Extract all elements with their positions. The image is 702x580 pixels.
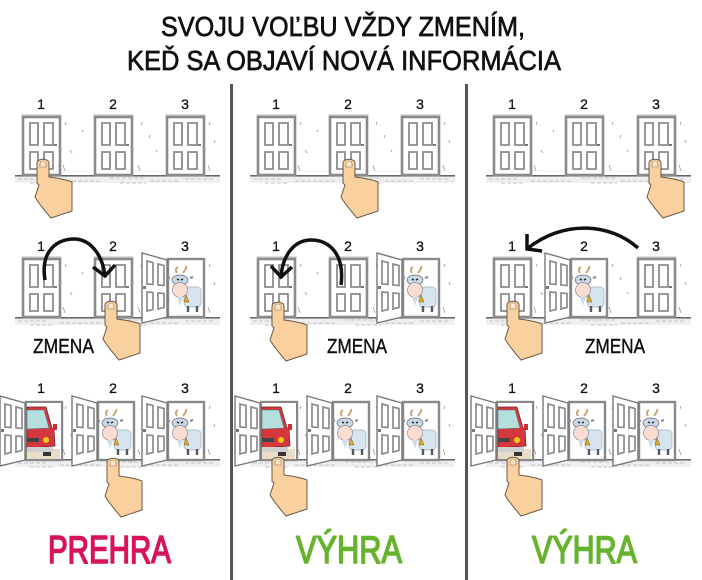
- scene: pick door 2: [250, 96, 455, 218]
- result: vyhra: VÝHRA: [296, 529, 402, 572]
- scene: switch to door 1: [250, 238, 455, 361]
- icon: hand on door 2: [103, 301, 140, 360]
- arrow: door 1 to door 2: [44, 239, 115, 280]
- scene: pick door 1: [15, 96, 220, 218]
- icon: hand on door 1 reveal: [270, 457, 307, 516]
- panel: scenario 1, loss: [0, 96, 220, 572]
- panel: scenario 3, win: [471, 96, 691, 572]
- scene: reveal, car behind door 1: [471, 380, 691, 516]
- title: KEĎ SA OBJAVÍ NOVÁ INFORMÁCIA: [127, 45, 561, 76]
- scene: switch to door 1: [486, 228, 691, 360]
- result: vyhra: VÝHRA: [532, 529, 637, 572]
- scene: pick door 3: [486, 96, 691, 218]
- icon: hand on door 2: [341, 159, 378, 218]
- scene: reveal, car behind door 1: [235, 380, 455, 516]
- title: SVOJU VOĽBU VŽDY ZMENÍM,: [161, 11, 525, 42]
- icon: hand on door 2 reveal: [105, 458, 142, 517]
- icon: hand on door 1: [35, 159, 72, 218]
- arrow: door 3 to door 1: [527, 228, 638, 251]
- icon: hand on door 1: [505, 301, 542, 360]
- scene: switch to door 2: [15, 238, 220, 360]
- icon: hand on door 1 reveal: [505, 457, 542, 516]
- icon: hand on door 1: [270, 302, 307, 361]
- panel: scenario 2, win: [235, 96, 455, 572]
- label: zmena: ZMENA: [585, 336, 646, 358]
- scene: reveal, goat behind door 2: [0, 380, 220, 517]
- arrow: door 2 to door 1: [271, 240, 342, 285]
- divider: left: [230, 84, 233, 580]
- label: zmena: ZMENA: [327, 336, 388, 358]
- icon: hand on door 3: [647, 159, 684, 218]
- divider: right: [465, 84, 468, 580]
- label: zmena: ZMENA: [33, 336, 95, 358]
- result: prehra: PREHRA: [48, 529, 171, 572]
- title: [127, 11, 561, 76]
